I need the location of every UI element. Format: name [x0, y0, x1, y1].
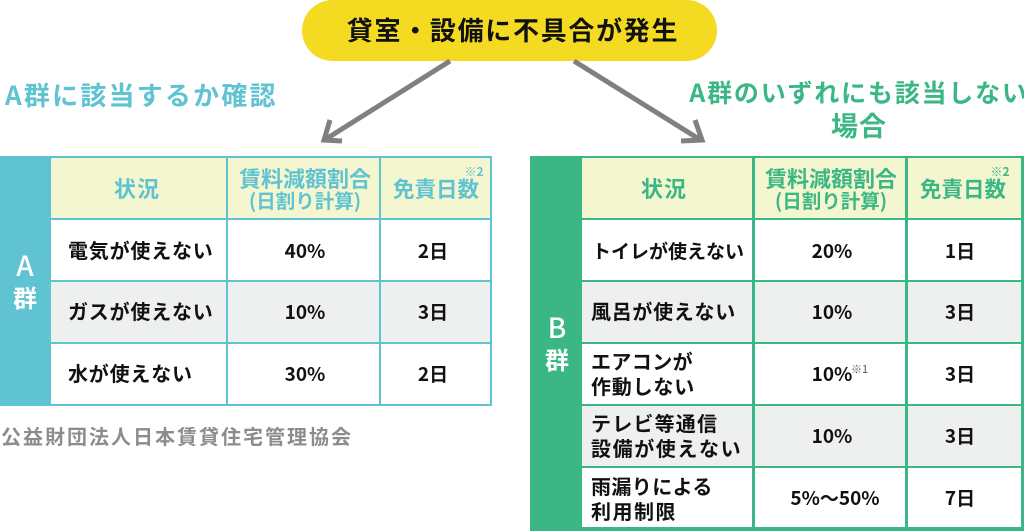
rows text B: 設備が使えない	[591, 433, 742, 462]
header text A: (日割り計算)	[249, 185, 361, 214]
side label A: A	[16, 245, 34, 285]
header text A: 賃料減額割合	[239, 162, 371, 194]
side label A	[13, 245, 37, 314]
rows text B: 3日	[945, 422, 975, 449]
rows text B: エアコンが	[591, 346, 693, 375]
heading: group A: A群に該当するか確認	[4, 76, 278, 113]
rows text A: 2日	[418, 360, 448, 387]
header text B: 免責日数	[920, 173, 1006, 204]
rows text B: 7日	[945, 484, 975, 511]
rows text B: 5%〜50%	[790, 484, 880, 511]
rows text B: 10%	[812, 360, 852, 387]
side label B	[545, 307, 569, 376]
rows text B: 3日	[945, 298, 975, 325]
rows text B: 作動しない	[591, 371, 695, 400]
title pill	[302, 0, 717, 61]
rows text B	[591, 237, 975, 525]
title pill: 貸室・設備に不具合が発生	[347, 11, 679, 48]
rows text B: トイレが使えない	[592, 237, 744, 264]
header text A: ※2	[464, 163, 484, 180]
rows text A: 2日	[418, 237, 448, 264]
header text A: 状況	[114, 172, 160, 204]
side label B: 群	[545, 341, 569, 376]
heading: group B: 場合	[831, 105, 887, 144]
arrow to group B	[574, 61, 702, 141]
header cells B	[582, 158, 1021, 218]
rows text B: 風呂が使えない	[591, 296, 736, 325]
rows text A: 10%	[285, 298, 325, 325]
rows text B: 3日	[945, 360, 975, 387]
header text A: 免責日数	[393, 173, 479, 204]
rows text A: 40%	[285, 237, 325, 264]
header text B	[641, 162, 1010, 214]
side label B: B	[548, 307, 566, 347]
row backgrounds B	[582, 220, 1021, 527]
heading: group B: A群のいずれにも該当しない	[688, 74, 1024, 110]
rows text B: テレビ等通信	[591, 408, 718, 437]
rows text B: 20%	[812, 237, 852, 264]
row backgrounds A	[51, 220, 490, 404]
rows text B: 1日	[945, 237, 975, 264]
rows text B: 雨漏りによる	[591, 471, 713, 500]
panel: group A table	[0, 156, 492, 406]
arrow to group A	[324, 61, 450, 141]
rows text A: 電気が使えない	[68, 235, 214, 264]
header text B: 賃料減額割合	[765, 162, 897, 194]
rows text B: 利用制限	[591, 496, 677, 525]
rows text A: 30%	[285, 360, 325, 387]
header text B: (日割り計算)	[775, 185, 887, 214]
panel: group B table	[530, 156, 1024, 531]
header cells A	[51, 158, 490, 218]
rows text A	[68, 235, 448, 387]
header text A	[114, 162, 484, 214]
rows text A: 3日	[418, 298, 448, 325]
header text B: ※2	[990, 163, 1010, 180]
rows text B: 10%	[812, 422, 852, 449]
rows text B: ※1	[851, 361, 868, 377]
source note: 公益財団法人日本賃貸住宅管理協会	[1, 421, 353, 450]
side label A: 群	[13, 279, 37, 314]
header text B: 状況	[641, 172, 687, 204]
rows text A: 水が使えない	[68, 358, 193, 387]
rows text B: 10%	[812, 298, 852, 325]
heading: group B	[688, 74, 1024, 144]
rows text A: ガスが使えない	[68, 296, 214, 325]
